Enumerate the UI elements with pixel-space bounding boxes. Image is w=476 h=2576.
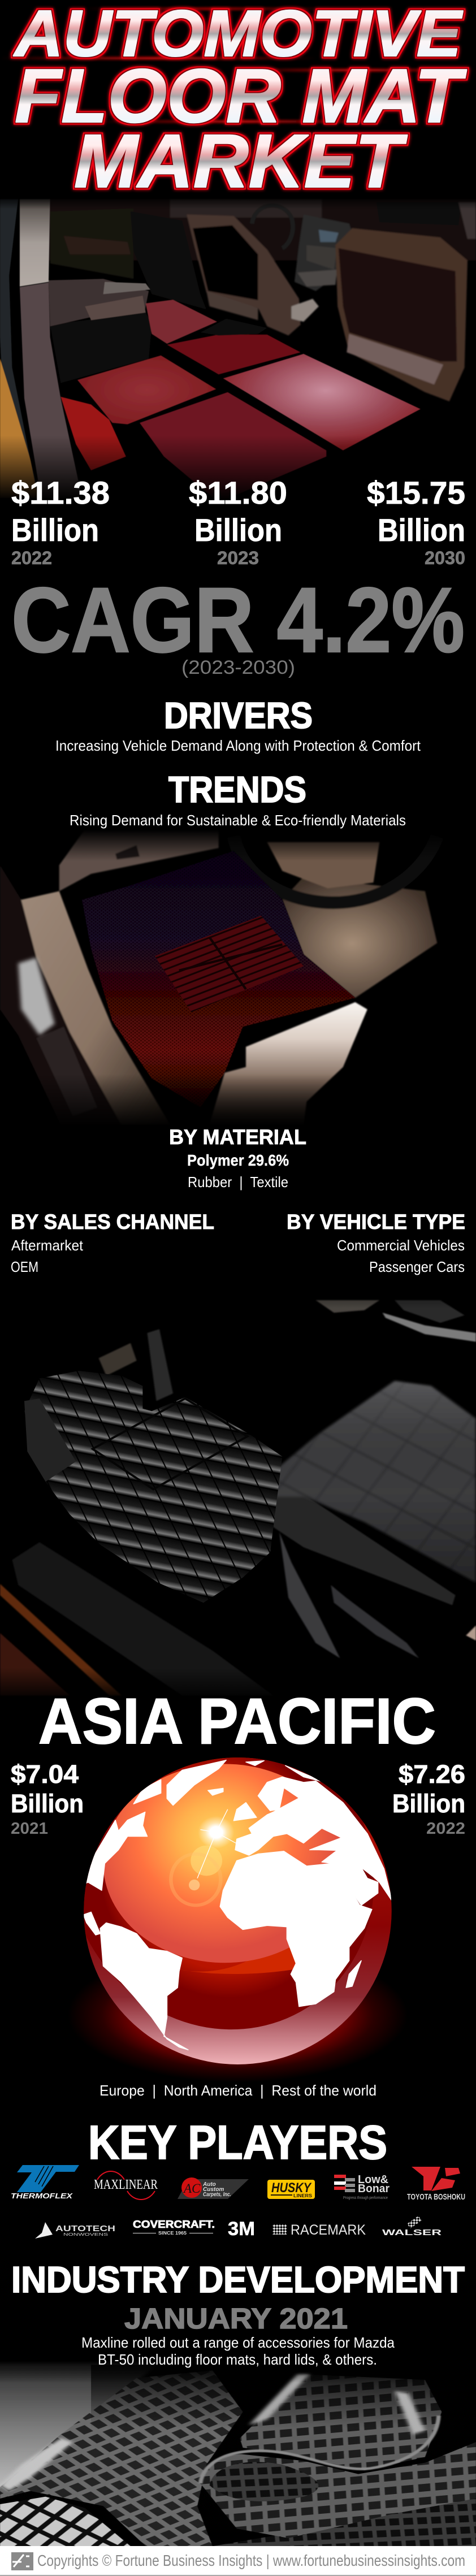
stat: 2022 region: 2022 xyxy=(426,1820,465,1838)
drivers: Increasing Vehicle Demand Along with Protection & Comfort xyxy=(55,737,421,754)
stat: 2021: Billion xyxy=(11,1789,84,1818)
trends xyxy=(70,769,406,829)
stat: 2021: 2021 xyxy=(11,1820,48,1838)
stat: 2030: Billion xyxy=(378,512,465,548)
logo: Low & Bonar xyxy=(334,2174,390,2200)
highlight on door sill xyxy=(18,958,55,1036)
logo: Thermoflex: THERMOFLEX xyxy=(11,2192,73,2200)
logo: Toyota Boshoku xyxy=(407,2167,465,2202)
logo: Husky Liners: LINERS xyxy=(293,2193,313,2198)
quilted mat xyxy=(24,1371,282,1603)
drivers: DRIVERS xyxy=(164,695,313,736)
reflection halo xyxy=(68,1947,408,2083)
logo: Autotech Nonwovens xyxy=(35,2222,115,2239)
text: industry development detail xyxy=(81,2334,395,2368)
logo: Auto Custom Carpets: AC xyxy=(183,2181,201,2196)
segment: by material xyxy=(169,1125,306,1190)
logo: Low & Bonar: Progress through performance xyxy=(343,2196,388,2200)
icon: Fortune Business Insights logo xyxy=(11,2552,33,2570)
red crescent xyxy=(179,1925,297,1974)
segment: by material: Polymer 29.6% xyxy=(187,1151,289,1169)
logo: Racemark: RACEMARK xyxy=(291,2222,366,2238)
key players heading: KEY PLAYERS xyxy=(88,2116,387,2169)
photo: car interior with red floor mats xyxy=(0,195,476,512)
foreground seat xyxy=(210,1002,367,1125)
stat: 2023: 2023 xyxy=(217,548,259,568)
dark shading over top of mesh xyxy=(91,2365,442,2423)
industry development: JANUARY 2021 xyxy=(124,2302,348,2335)
mat xyxy=(82,851,355,1107)
segment: by vehicle type: BY VEHICLE TYPE xyxy=(287,1210,465,1233)
segment: by material: Rubber | Textile xyxy=(188,1174,288,1190)
logo: Covercraft xyxy=(133,2219,215,2236)
title xyxy=(0,0,476,204)
dark background mesh xyxy=(213,2499,476,2546)
logo: Husky Liners xyxy=(267,2180,315,2199)
logo: Thermoflex xyxy=(11,2165,79,2200)
sun flare xyxy=(197,1809,239,1878)
segment: by sales channel: Aftermarket xyxy=(11,1237,84,1254)
glowing red lines xyxy=(0,8,476,123)
stat: 2030 xyxy=(367,475,465,568)
photo: honeycomb red floor mat xyxy=(0,833,438,1122)
side strip xyxy=(24,1399,76,1482)
photo: mesh floor mat xyxy=(0,2354,476,2546)
stat: 2022 region: $7.26 xyxy=(399,1760,465,1789)
photo: black quilted floor mat xyxy=(0,1269,476,1702)
segment: by vehicle type: Passenger Cars xyxy=(369,1258,465,1275)
logo: Autotech Nonwovens: AUTOTECH xyxy=(55,2224,115,2233)
logo: Auto Custom Carpets: Custom xyxy=(203,2187,224,2193)
stat: 2022 region xyxy=(392,1760,465,1838)
inside of roll xyxy=(210,2462,318,2501)
lower rolled mesh xyxy=(200,2442,476,2538)
logo: Autotech Nonwovens: NONWOVENS xyxy=(63,2233,109,2237)
logo: 3M: 3M xyxy=(228,2218,255,2240)
segment: by sales channel xyxy=(11,1210,214,1275)
CAGR: (2023-2030) xyxy=(181,657,295,678)
industry development xyxy=(11,2259,465,2335)
title line 2: FLOOR MAT xyxy=(15,53,466,138)
bright foreground mesh xyxy=(0,2497,131,2546)
segment: by sales channel: BY SALES CHANNEL xyxy=(11,1210,214,1233)
stat: 2021 xyxy=(11,1760,84,1838)
right rolled mesh xyxy=(240,2374,442,2470)
mat heel pad outline xyxy=(93,1399,248,1489)
inner shell xyxy=(35,1687,406,2055)
continents xyxy=(82,1760,392,2050)
region heading: ASIA PACIFIC xyxy=(38,1686,436,1757)
text: industry development detail: Maxline rolled out a range of accessories for Mazda xyxy=(81,2334,395,2351)
blurred quilted seat xyxy=(270,1381,476,1583)
globe xyxy=(35,1687,408,2083)
stat: 2022: $11.38 xyxy=(11,475,110,510)
segment: by vehicle type xyxy=(287,1210,465,1275)
stat: 2023 xyxy=(189,475,287,568)
stat: 2030: 2030 xyxy=(425,548,465,568)
footer xyxy=(0,2546,476,2576)
logo: MaxLinear: MAXLINEAR xyxy=(94,2177,158,2192)
logo: Low & Bonar: Low& xyxy=(358,2174,388,2186)
segment: by vehicle type: Commercial Vehicles xyxy=(337,1237,465,1254)
trends: TRENDS xyxy=(168,769,306,810)
left mesh fold xyxy=(0,2370,243,2546)
other regions: Europe | North America | Rest of the world xyxy=(99,2082,377,2099)
industry development: INDUSTRY DEVELOPMENT xyxy=(11,2259,465,2300)
lens flares xyxy=(171,1846,222,1905)
text: industry development detail: BT-50 including floor mats, hard lids, & others. xyxy=(98,2351,377,2368)
logo: Walser: WALSER xyxy=(382,2228,442,2237)
lit ocean xyxy=(103,1764,346,1963)
stat: 2022 region: Billion xyxy=(392,1789,465,1818)
sphere xyxy=(84,1757,392,2064)
trends: Rising Demand for Sustainable & Eco-friendly Materials xyxy=(70,812,406,829)
stat: 2023: Billion xyxy=(194,512,282,548)
segment: by material: BY MATERIAL xyxy=(169,1125,306,1149)
tube edge xyxy=(200,2415,439,2483)
stat: 2030: $15.75 xyxy=(367,475,465,510)
logo: Walser xyxy=(382,2216,442,2237)
logo: Low & Bonar: Bonar xyxy=(358,2183,390,2195)
logo: Covercraft: COVERCRAFT. xyxy=(133,2219,215,2230)
stat: 2022: 2022 xyxy=(11,548,52,568)
stat: 2023: $11.80 xyxy=(189,475,287,510)
logo: MaxLinear xyxy=(94,2171,158,2200)
title line 3: MARKET xyxy=(74,119,408,204)
stat: 2022 xyxy=(11,475,110,568)
stat: 2021: $7.04 xyxy=(11,1760,79,1789)
logo: Auto Custom Carpets xyxy=(178,2177,249,2199)
stat: 2022: Billion xyxy=(11,512,99,548)
heel pad xyxy=(155,916,304,1012)
drivers xyxy=(55,695,421,754)
logo: Auto Custom Carpets: Carpets, Inc. xyxy=(203,2192,231,2198)
logo: Covercraft: SINCE 1965 xyxy=(158,2230,187,2236)
logo: Auto Custom Carpets: Auto xyxy=(202,2181,216,2188)
segment: by sales channel: OEM xyxy=(11,1258,38,1275)
logo: Husky Liners: HUSKY xyxy=(271,2180,312,2196)
